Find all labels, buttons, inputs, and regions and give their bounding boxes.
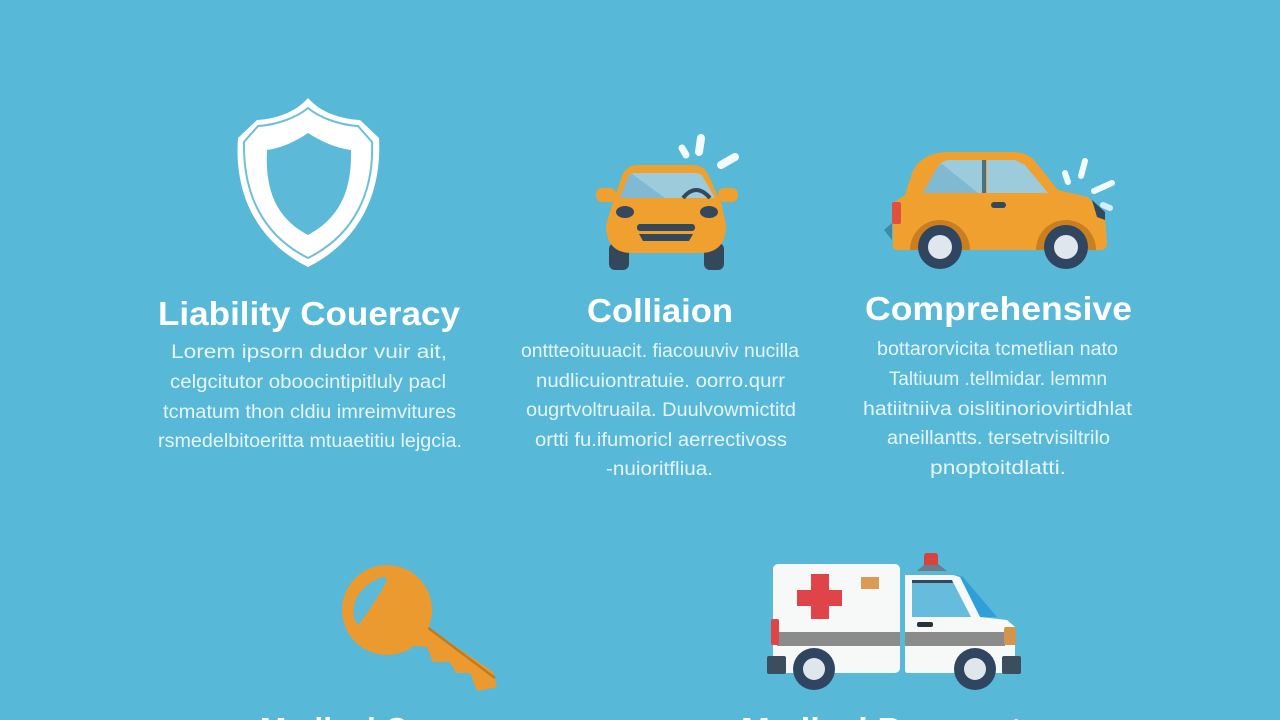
icon: impact sparks: [682, 138, 735, 165]
text block: collision description: ortti fu.ifumoricl aerrectivoss: [535, 430, 787, 451]
text block: collision description: [521, 341, 799, 480]
text block: comprehensive description: pnoptoitdlatti.: [930, 458, 1066, 479]
text block: liability description: tcmatum thon cldiu imreimvitures: [163, 402, 456, 423]
panel: medical payments: [741, 553, 1041, 720]
text block: liability description: rsmedelbitoeritta mtuaetitiu lejgcia.: [158, 431, 462, 452]
icon: key: [342, 565, 497, 691]
panel: comprehensive: [863, 152, 1133, 479]
text block: collision description: nudlicuiontratuie. oorro.qurr: [536, 371, 786, 392]
heading: liability: Liability Coueracy: [158, 295, 461, 332]
text block: comprehensive description: bottarorvicita tcmetlian nato: [877, 339, 1118, 360]
icon: side-view car: [884, 152, 1107, 269]
text block: comprehensive description: [863, 339, 1133, 479]
icon: red cross: [797, 574, 842, 619]
text block: liability description: celgcitutor oboocintipitluly pacl: [170, 372, 446, 393]
text block: collision description: -nuioritfliua.: [606, 459, 713, 480]
text block: comprehensive description: hatiitniiva oislitinoriovirtidhlat: [863, 399, 1133, 420]
icon: ambulance: [767, 553, 1021, 690]
panel: liability coverage: [158, 98, 462, 452]
text block: collision description: ougrtvoltruaila. Duulvowmictitd: [526, 400, 796, 421]
text block: comprehensive description: aneillantts. tersetrvisiltrilo: [887, 428, 1110, 449]
heading: comprehensive: Comprehensive: [865, 290, 1132, 327]
heading: collision: Colliaion: [587, 292, 733, 329]
icon: front-view car: [596, 165, 738, 270]
text block: liability description: [158, 342, 462, 452]
panel: collision: [521, 138, 799, 480]
icon: shield: [238, 98, 379, 267]
icon: impact sparks: [1065, 161, 1112, 208]
panel: medical coverage: [260, 565, 497, 720]
text block: liability description: Lorem ipsorn dudor vuir ait,: [171, 342, 447, 363]
text block: collision description: onttteoituuacit. fiacouuviv nucilla: [521, 341, 799, 362]
text block: comprehensive description: Taltiuum .tellmidar. lemmn: [889, 369, 1107, 390]
